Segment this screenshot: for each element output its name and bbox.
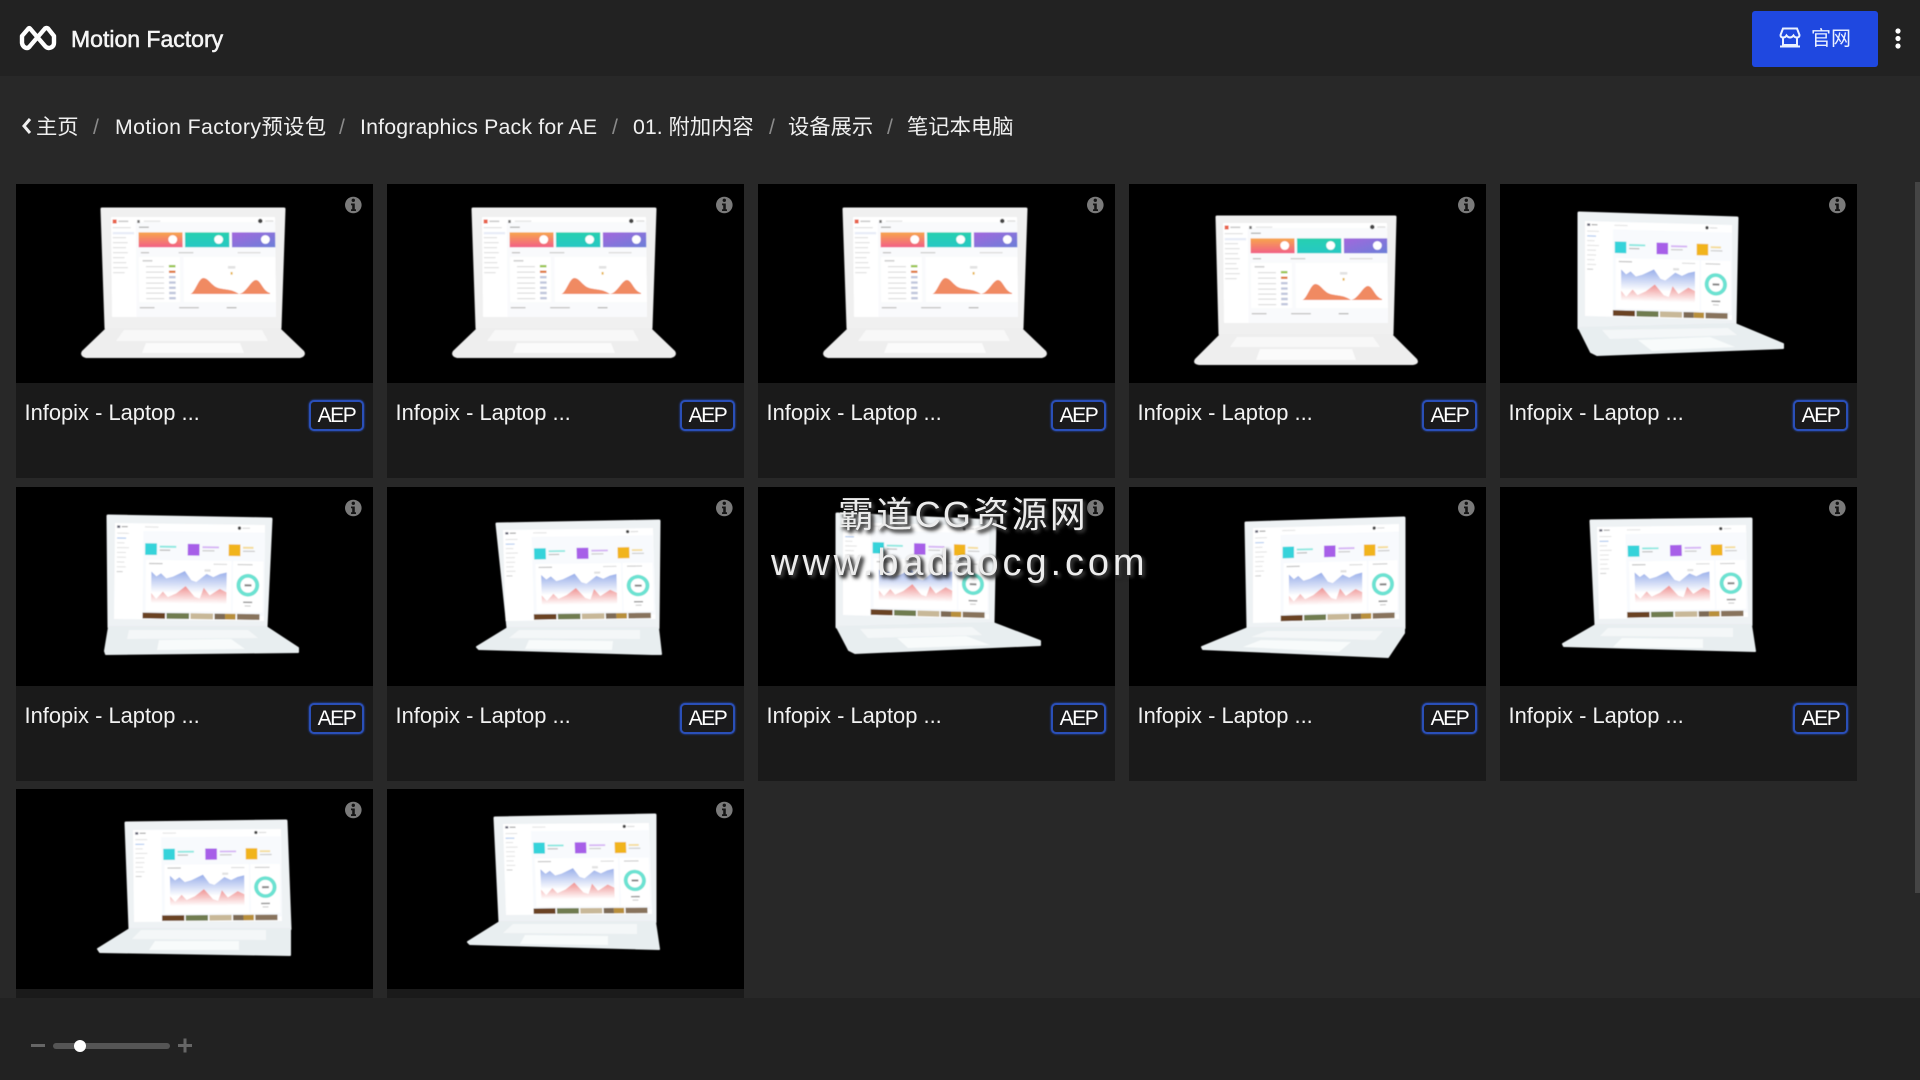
thumbnail: angled laptop left	[387, 789, 744, 989]
badge: AEP	[309, 400, 364, 431]
brand name: Motion Factory	[71, 26, 223, 52]
crumb: extras: 01. 附加内容	[633, 115, 754, 139]
badge: AEP	[680, 400, 735, 431]
badge: AEP	[1051, 400, 1106, 431]
watermark line 1: 霸道CG资源网	[838, 494, 1088, 535]
crumb separator: /	[769, 115, 775, 139]
breadcrumb	[22, 115, 1014, 139]
badge: AEP: AEP	[689, 707, 726, 730]
badge: AEP: AEP	[1060, 707, 1097, 730]
thumbnail: angled laptop	[16, 487, 373, 686]
card title: Infopix - Laptop ...	[24, 703, 200, 728]
footer with zoom slider	[0, 998, 1920, 1080]
thumbnail: front laptop	[387, 184, 744, 383]
badge: AEP	[1051, 703, 1106, 734]
badge: AEP	[309, 703, 364, 734]
badge: AEP: AEP	[1802, 404, 1839, 427]
card 4	[1129, 184, 1486, 478]
badge: AEP: AEP	[318, 707, 355, 730]
crumb separator: /	[887, 115, 893, 139]
card title: Infopix - Laptop ...	[1138, 703, 1313, 728]
thumbnail: angled laptop left	[16, 789, 373, 989]
scrollbar	[1915, 182, 1920, 893]
badge: AEP	[1793, 400, 1848, 431]
crumb: pack name: Infographics Pack for AE	[360, 115, 597, 139]
card 3	[758, 184, 1115, 478]
card 12	[387, 789, 744, 998]
badge: AEP: AEP	[1431, 707, 1468, 730]
badge: AEP	[1422, 400, 1477, 431]
icon: zoom out	[31, 1044, 45, 1047]
badge: AEP: AEP	[1802, 707, 1839, 730]
card title: Infopix - Laptop ...	[396, 703, 571, 728]
thumbnail: angled laptop	[758, 487, 1115, 686]
crumb separator: /	[339, 115, 345, 139]
crumb: laptop: 笔记本电脑	[907, 115, 1014, 139]
slider knob	[74, 1040, 86, 1052]
badge: AEP	[680, 703, 735, 734]
crumb: preset pack: Motion Factory预设包	[115, 115, 327, 139]
button label: 官网	[1811, 28, 1851, 50]
watermark line 2: www.badaocg.com	[771, 542, 1148, 584]
badge: AEP: AEP	[1060, 404, 1097, 427]
thumbnail: front laptop lower	[1129, 184, 1486, 383]
card title: Infopix - Laptop ...	[1508, 400, 1684, 425]
icon: back chevron	[22, 118, 31, 134]
card 6	[16, 487, 373, 781]
thumbnail: angled laptop left	[387, 487, 744, 686]
icon: more menu	[1895, 28, 1901, 49]
button: official site	[1752, 11, 1878, 67]
icon: store	[1780, 28, 1800, 48]
header bar	[0, 0, 1920, 76]
badge: AEP: AEP	[1431, 404, 1468, 427]
badge: AEP	[1793, 703, 1848, 734]
card title: Infopix - Laptop ...	[766, 400, 942, 425]
thumbnail: angled laptop	[1500, 184, 1857, 383]
card 11	[16, 789, 373, 998]
card 7	[387, 487, 744, 781]
slider track	[53, 1043, 170, 1049]
card 8	[758, 487, 1115, 781]
card 10	[1500, 487, 1857, 781]
card title: Infopix - Laptop ...	[766, 703, 942, 728]
badge: AEP: AEP	[318, 404, 355, 427]
logo: Motion Factory mark	[20, 26, 56, 50]
thumbnail: angled laptop left	[1500, 487, 1857, 686]
card title: Infopix - Laptop ...	[1138, 400, 1313, 425]
card 9	[1129, 487, 1486, 781]
badge: AEP: AEP	[689, 404, 726, 427]
card 2	[387, 184, 744, 478]
crumb separator: /	[612, 115, 618, 139]
card title: Infopix - Laptop ...	[396, 400, 571, 425]
thumbnail: front laptop	[16, 184, 373, 383]
card 1	[16, 184, 373, 478]
icon: zoom in	[178, 1038, 192, 1052]
crumb separator: /	[93, 115, 99, 139]
thumbnail: angled laptop left	[1129, 487, 1486, 686]
crumb: home: 主页	[36, 115, 79, 139]
badge: AEP	[1422, 703, 1477, 734]
card 5	[1500, 184, 1857, 478]
card title: Infopix - Laptop ...	[24, 400, 200, 425]
card title: Infopix - Laptop ...	[1508, 703, 1684, 728]
thumbnail: front laptop	[758, 184, 1115, 383]
crumb: device showcase: 设备展示	[788, 115, 873, 139]
